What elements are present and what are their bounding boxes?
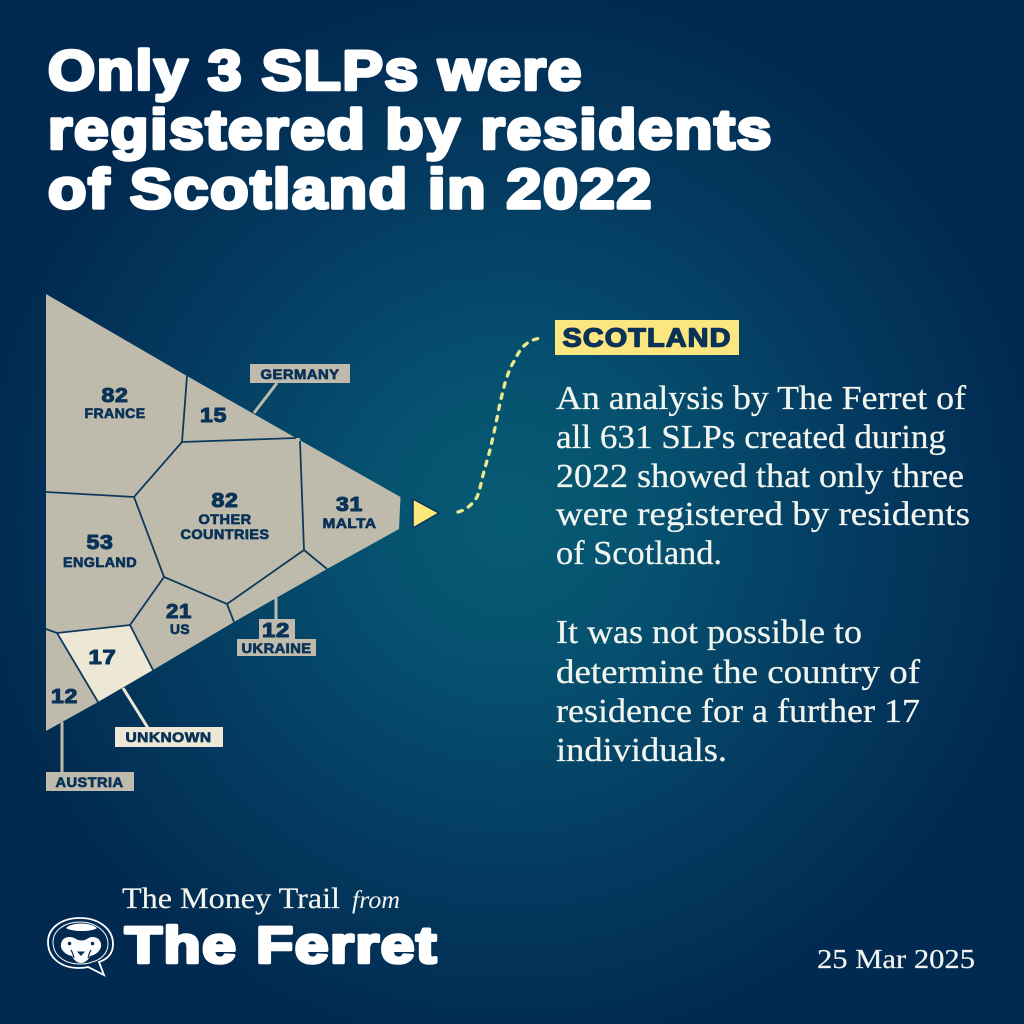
cell borders	[46, 376, 327, 702]
label: Other countries: 82	[212, 490, 238, 512]
footer brand text: The Ferret	[125, 916, 438, 974]
callout: Ukraine: 12	[262, 620, 290, 642]
callout: Unknown: UNKNOWN	[126, 730, 212, 745]
label: France: 82	[102, 385, 128, 407]
text block: unknown residence	[556, 614, 921, 769]
cell: Malta	[296, 438, 400, 569]
text block: unknown residence: determine the country of	[556, 654, 921, 691]
title: registered by residents	[48, 98, 773, 160]
callout: Austria: AUSTRIA	[56, 775, 124, 790]
text block: analysis: all 631 SLPs created during	[556, 419, 946, 456]
heading: Scotland: SCOTLAND	[562, 322, 732, 352]
label: France	[84, 385, 146, 421]
callout: Austria	[46, 722, 134, 791]
label: US: 21	[166, 601, 192, 623]
title: Only 3 SLPs were	[48, 38, 583, 102]
footer brand text	[122, 883, 438, 974]
text block: unknown residence: It was not possible to	[556, 614, 862, 651]
icon: ferret logo	[48, 918, 113, 975]
text block: analysis	[556, 380, 970, 572]
callout: Ukraine: UKRAINE	[242, 641, 312, 656]
footer brand text: from	[352, 887, 400, 914]
label: Malta: MALTA	[322, 516, 376, 531]
cell: France	[46, 294, 187, 497]
label: Germany value: 15	[200, 405, 227, 427]
date: 25 Mar 2025	[817, 944, 975, 974]
label: US	[166, 601, 192, 637]
callout: Germany	[250, 364, 350, 413]
label: US: US	[170, 622, 190, 637]
cell: Other countries	[134, 438, 304, 604]
label: Malta: 31	[336, 494, 363, 516]
callout: Unknown	[115, 688, 223, 747]
label: England: ENGLAND	[63, 555, 137, 570]
icon: Scotland yellow triangle	[413, 499, 439, 528]
label: Malta	[322, 494, 376, 531]
label: Unknown value: 17	[88, 647, 116, 669]
title: of Scotland in 2022	[48, 157, 653, 220]
cell: Germany	[182, 376, 296, 442]
arrow: dotted connector	[458, 338, 542, 512]
footer brand text: The Money Trail	[122, 883, 340, 915]
cell: Unknown	[57, 625, 153, 702]
label: England: 53	[86, 532, 114, 554]
label: Other countries	[180, 490, 270, 542]
cell: Ukraine	[227, 550, 327, 622]
cell: US	[130, 577, 234, 670]
label: Other countries: COUNTRIES	[180, 527, 270, 542]
label: Austria value: 12	[51, 686, 78, 708]
label: Other countries: OTHER	[198, 512, 252, 527]
text block: analysis: of Scotland.	[556, 535, 722, 572]
text block: analysis: An analysis by The Ferret of	[556, 380, 967, 417]
voronoi triangle chart	[46, 294, 400, 731]
title	[48, 38, 773, 220]
label: France: FRANCE	[84, 406, 146, 421]
text block: unknown residence: residence for a further 17	[556, 693, 920, 730]
label: England	[63, 532, 137, 570]
text block: unknown residence: individuals.	[556, 732, 727, 769]
text block: analysis: 2022 showed that only three	[556, 458, 964, 495]
callout: Germany: GERMANY	[260, 367, 340, 382]
text block: analysis: were registered by residents	[556, 496, 970, 533]
cell: Austria	[46, 629, 98, 731]
cell: England	[46, 492, 164, 633]
callout: Ukraine	[237, 598, 316, 656]
